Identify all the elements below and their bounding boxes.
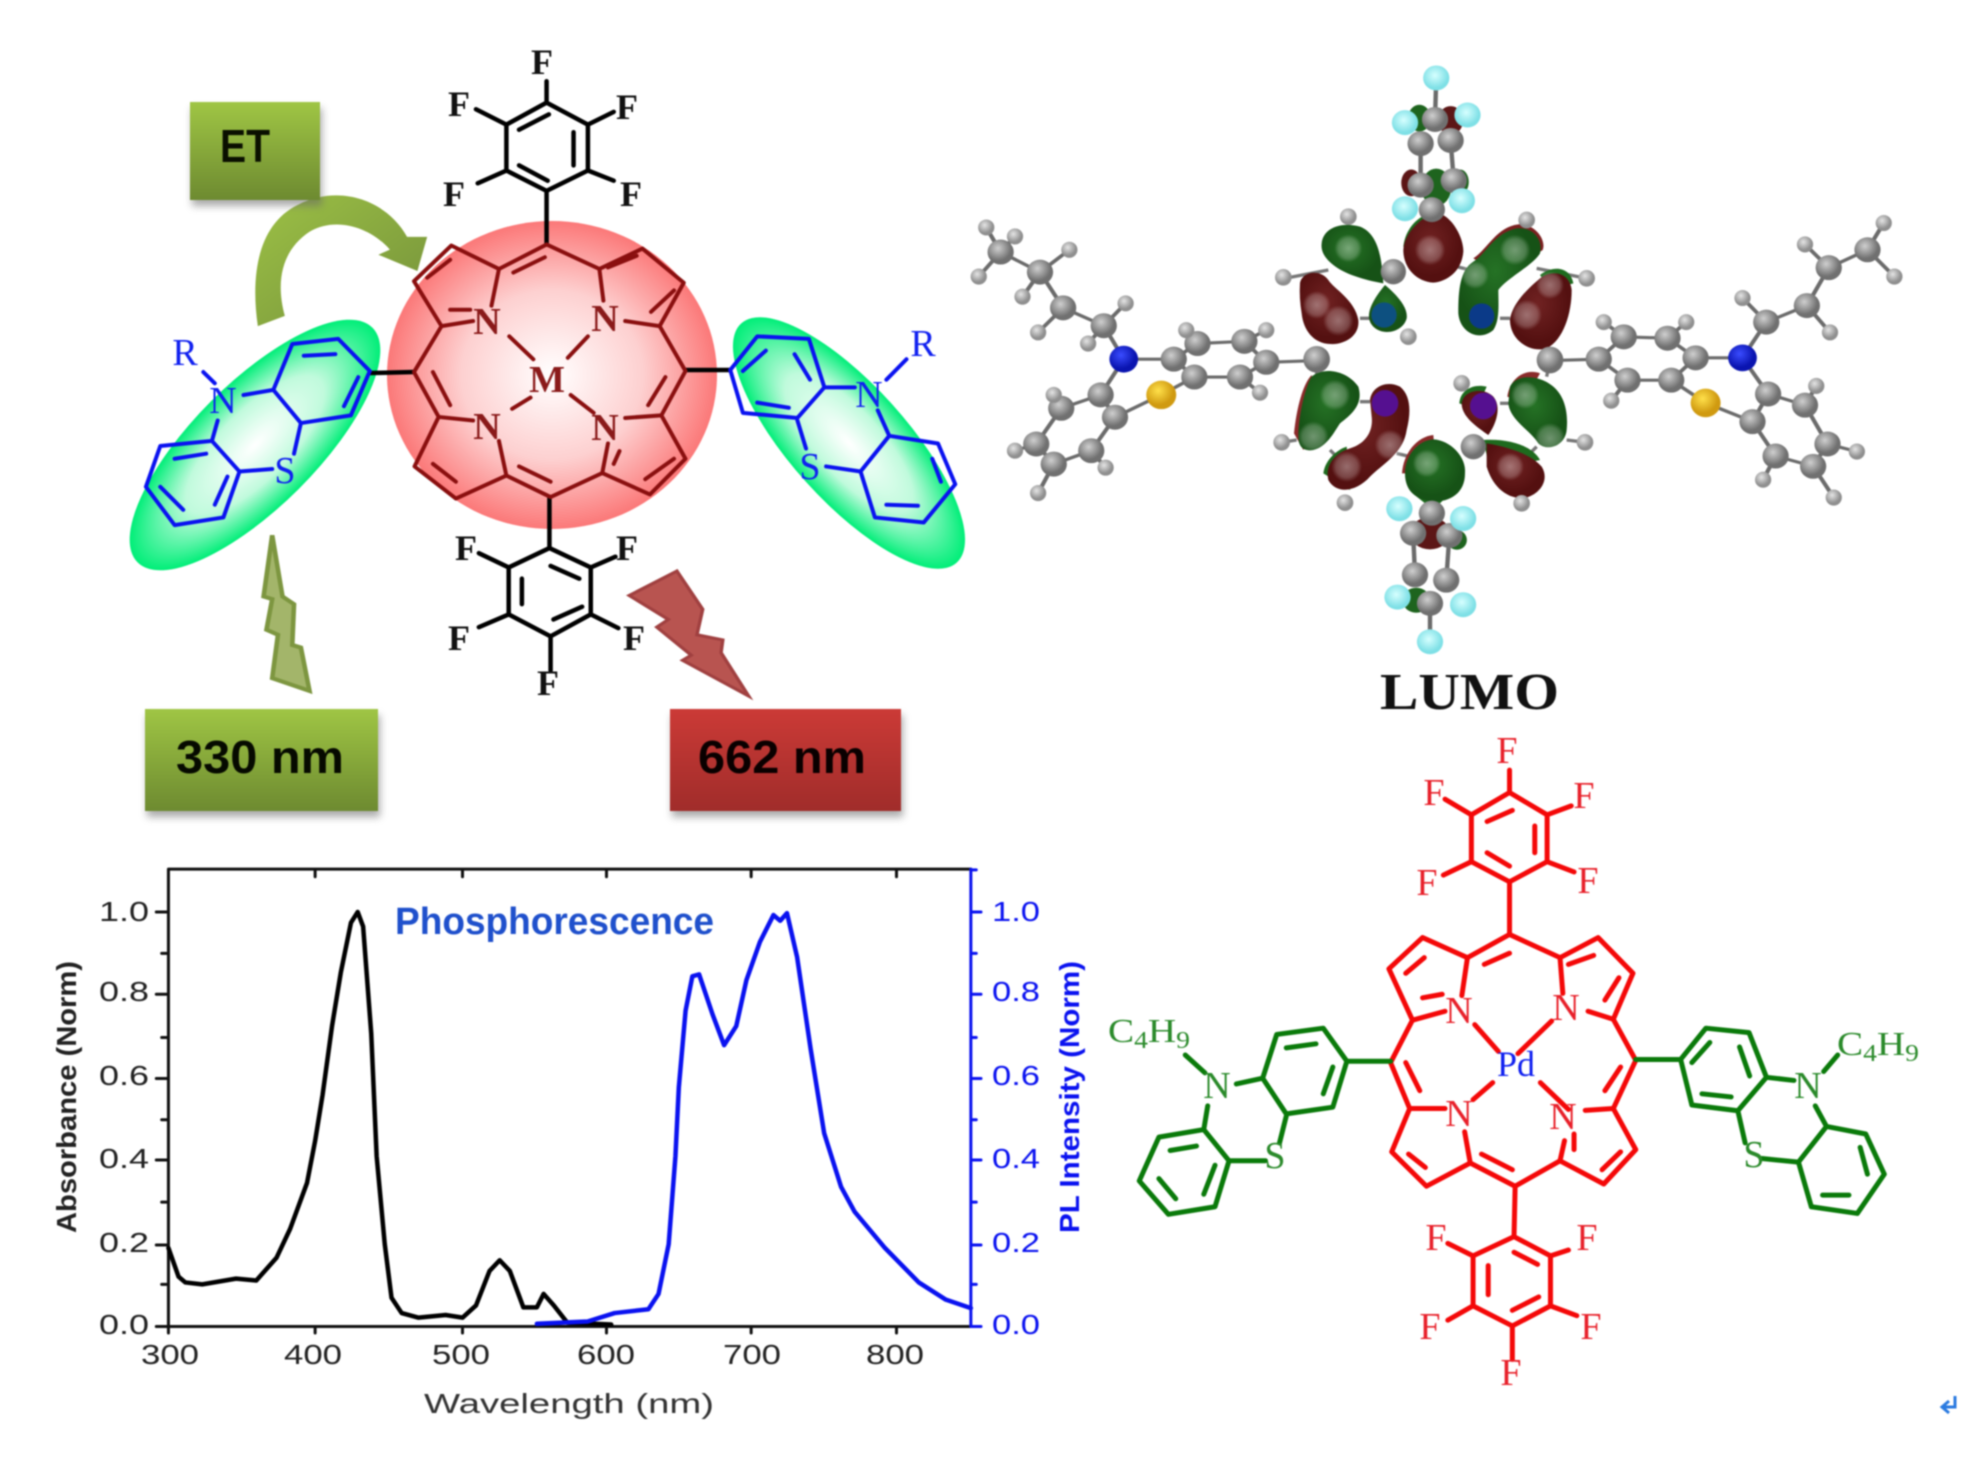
box: ET: ET — [220, 120, 270, 172]
atom labels: scheme molecule: F — [448, 84, 470, 124]
atom labels: scheme molecule: N — [473, 301, 501, 343]
chart axes — [156, 869, 981, 1333]
atom labels: Pd molecule: F — [1500, 1352, 1522, 1394]
left axis tick labels: 0.6 — [99, 1060, 149, 1091]
curved ET arrow — [255, 195, 427, 326]
right axis tick labels: 0.2 — [992, 1227, 1040, 1258]
icon: return arrow — [1942, 1396, 1955, 1413]
lightning: red emission — [629, 571, 749, 696]
x axis tick labels: 400 — [284, 1339, 342, 1370]
atom labels: scheme molecule: S — [274, 450, 296, 492]
LUMO outer atoms — [971, 65, 1902, 654]
atom highlights inside lobes — [1298, 234, 1565, 482]
right axis tick labels — [992, 896, 1040, 1340]
atom labels: Pd molecule: N — [1552, 987, 1580, 1029]
x axis tick labels: 600 — [577, 1339, 635, 1370]
lobe: red upper right — [1510, 269, 1573, 349]
x axis tick labels: 800 — [866, 1339, 924, 1370]
phenyl lobes — [1401, 105, 1469, 613]
panel: absorbance and PL spectrum chart — [51, 869, 1085, 1419]
atom labels: scheme molecule: N — [209, 380, 237, 422]
atom labels: scheme molecule: F — [455, 528, 477, 568]
atom labels: scheme molecule: M — [529, 359, 565, 401]
atom labels: scheme molecule — [172, 42, 936, 703]
atom labels: Pd molecule: F — [1580, 1306, 1602, 1348]
atom labels: scheme molecule: N — [855, 374, 883, 416]
C4H9 label left: 9 — [1176, 1028, 1190, 1054]
atom labels: Pd molecule: N — [1794, 1065, 1822, 1107]
atom labels: scheme molecule: F — [448, 618, 470, 658]
C4H9 label left: 4 — [1134, 1028, 1148, 1054]
lobe: green small with nitrogen — [1369, 285, 1407, 332]
lobe: green lower left — [1294, 371, 1360, 450]
blue phenothiazine left and right — [146, 336, 955, 525]
atom labels: Pd molecule: F — [1423, 772, 1445, 814]
left axis tick labels: 0.8 — [99, 976, 149, 1007]
box: 662 nm — [670, 709, 903, 817]
atom labels: Pd molecule: N — [1445, 990, 1473, 1032]
atom labels: Pd molecule: F — [1496, 730, 1518, 772]
atom labels: scheme molecule: N — [591, 407, 619, 449]
atom labels: Pd molecule: N — [1549, 1096, 1577, 1138]
LUMO bonds — [979, 78, 1894, 642]
C4H9 label right: H — [1877, 1026, 1905, 1063]
lobe: red small lower right — [1459, 386, 1498, 435]
panel: LUMO orbital model — [971, 65, 1902, 721]
x axis tick labels: 500 — [432, 1339, 490, 1370]
right axis tick labels: 0.8 — [992, 976, 1040, 1007]
LUMO label: LUMO — [1380, 664, 1559, 721]
right axis tick labels: 0.0 — [992, 1309, 1040, 1340]
lobe: red upper left — [1300, 273, 1358, 344]
atom labels: scheme molecule: F — [616, 528, 638, 568]
atom labels: Pd molecule: F — [1577, 860, 1599, 902]
lobe: green bottom — [1402, 435, 1465, 510]
atom labels: Pd molecule: F — [1573, 775, 1595, 817]
x axis title: Wavelength (nm) — [424, 1388, 714, 1419]
atom labels: scheme molecule: F — [537, 663, 559, 703]
atom labels: scheme molecule: F — [620, 174, 642, 214]
red porphyrin and pentafluorophenyl bonds — [1389, 770, 1636, 1359]
box: 662 nm: 662 nm — [698, 731, 866, 783]
atom labels: scheme molecule: N — [473, 406, 501, 448]
right axis tick labels: 0.6 — [992, 1060, 1040, 1091]
panel: Pd porphyrin structure — [1108, 730, 1919, 1394]
green phenothiazine bonds — [1139, 1028, 1884, 1214]
red porphyrin core sphere — [387, 221, 717, 529]
atom labels: scheme molecule: F — [616, 87, 638, 127]
central orbital lobes — [1273, 208, 1595, 512]
atom labels: Pd molecule: F — [1576, 1217, 1598, 1259]
lobe: green upper left — [1322, 225, 1383, 283]
left axis tick labels: 0.0 — [99, 1309, 149, 1340]
fluorine atoms — [1384, 65, 1481, 654]
C4H9 label left: C — [1108, 1013, 1131, 1050]
panel: energy transfer scheme — [94, 42, 1000, 817]
C4H9 label left: H — [1148, 1013, 1176, 1050]
atom labels: Pd molecule: N — [1445, 1093, 1473, 1135]
x axis tick labels: 700 — [723, 1339, 781, 1370]
lobe: green upper right — [1458, 224, 1543, 335]
curve: absorbance (black) — [168, 912, 611, 1325]
atom labels: scheme molecule: R — [910, 323, 936, 365]
left axis tick labels: 0.4 — [99, 1143, 149, 1174]
right axis title: PL Intensity (Norm) — [1054, 961, 1085, 1233]
atom labels: scheme molecule: F — [531, 42, 553, 82]
atom labels: Pd molecule: S — [1264, 1135, 1286, 1177]
green donor lobe left — [94, 284, 416, 606]
central bonds — [1282, 267, 1587, 457]
hydrogen atoms — [971, 215, 1902, 506]
box: 330 nm — [145, 709, 380, 817]
atom labels: Pd molecule: S — [1743, 1134, 1765, 1176]
box: 330 nm: 330 nm — [176, 731, 344, 783]
lobe: green lower right — [1507, 372, 1567, 447]
atom labels: scheme molecule: F — [623, 618, 645, 658]
central nitrogen atoms — [1371, 302, 1497, 419]
C4H9 label right: 9 — [1905, 1041, 1919, 1067]
C4H9 label right: C — [1837, 1026, 1860, 1063]
right axis tick labels: 0.4 — [992, 1143, 1040, 1174]
lobe: red lower left — [1323, 384, 1409, 490]
central carbon atoms — [1303, 259, 1563, 459]
right axis tick labels: 1.0 — [992, 896, 1040, 927]
atom labels: Pd molecule — [1203, 730, 1822, 1394]
C4H9 label right: 4 — [1863, 1041, 1877, 1067]
atom labels: Pd molecule: F — [1416, 862, 1438, 904]
atom labels: scheme molecule: S — [799, 446, 821, 488]
atom labels: scheme molecule: R — [172, 332, 198, 374]
left axis tick labels — [99, 896, 149, 1340]
left axis tick labels: 0.2 — [99, 1227, 149, 1258]
atom labels: Pd molecule: N — [1203, 1065, 1231, 1107]
black pentafluorophenyl rings — [370, 81, 730, 671]
left axis title: Absorbance (Norm) — [51, 961, 82, 1233]
atom labels: Pd molecule: F — [1425, 1217, 1447, 1259]
carbon atoms — [988, 107, 1881, 616]
lobe: red top — [1403, 213, 1463, 283]
atom labels: scheme molecule: N — [591, 298, 619, 340]
x axis tick labels — [141, 1339, 924, 1370]
nitrogen and sulfur atoms — [1109, 344, 1757, 417]
x axis tick labels: 300 — [141, 1339, 199, 1370]
atom labels: scheme molecule: F — [443, 174, 465, 214]
box: ET — [190, 102, 322, 206]
dark red porphyrin skeleton — [414, 244, 685, 499]
lightning: green excitation — [264, 535, 310, 691]
Phosphorescence label: Phosphorescence — [395, 901, 714, 943]
curve: phosphorescence (blue) — [537, 913, 971, 1324]
green donor lobe right — [698, 285, 1000, 601]
left axis tick labels: 1.0 — [99, 896, 149, 927]
central hydrogen atoms — [1273, 208, 1595, 512]
atom labels: Pd molecule: F — [1419, 1306, 1441, 1348]
atom labels: Pd molecule: Pd — [1497, 1044, 1535, 1084]
lobe: red bottom right — [1483, 440, 1545, 498]
